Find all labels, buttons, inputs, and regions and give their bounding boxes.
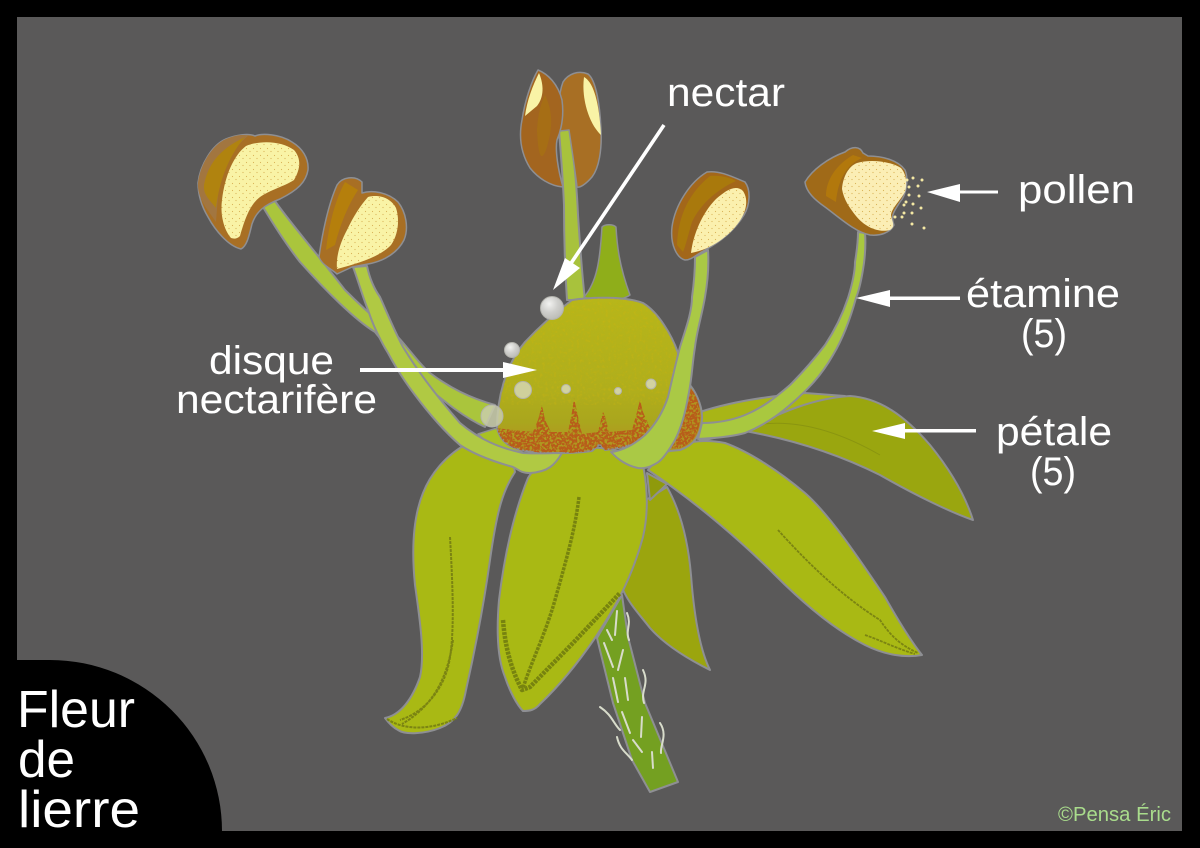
label: nectar: nectar	[667, 71, 785, 115]
petal: right	[648, 441, 922, 656]
label: étamine (5): étamine	[966, 272, 1120, 316]
label: disque nectarifère: nectarifère	[176, 378, 377, 422]
copyright: ©Pensa Éric	[1058, 803, 1171, 826]
label: disque nectarifère	[176, 339, 377, 422]
anther: top centre	[520, 70, 601, 187]
label: étamine (5)	[966, 272, 1120, 356]
flower stem	[597, 595, 678, 792]
stamen: outer right	[698, 232, 865, 439]
stamen: central back	[559, 127, 585, 300]
arrow: pollen	[927, 184, 998, 202]
title: Fleur	[17, 681, 135, 739]
right disc lobe	[660, 385, 702, 452]
stem hairs	[600, 611, 664, 768]
stamen: inner right	[611, 250, 708, 468]
stamen: lower left	[353, 266, 562, 473]
petal: centre	[498, 448, 647, 711]
title: de	[18, 731, 75, 789]
disc texture	[495, 295, 680, 460]
arrow: pétale	[872, 423, 976, 439]
label: étamine (5): (5)	[1021, 312, 1067, 356]
title: lierre	[18, 781, 140, 839]
anther: second left	[319, 178, 406, 274]
title	[17, 681, 140, 839]
label: disque nectarifère: disque	[209, 339, 334, 383]
arrow: nectar	[553, 124, 666, 290]
arrow: disque nectarifère	[360, 362, 537, 378]
pistil style	[584, 225, 630, 301]
title corner	[17, 660, 222, 839]
label: pétale (5)	[996, 410, 1112, 494]
nectar disc	[495, 295, 680, 460]
pollen grains	[894, 176, 926, 230]
petal: back right	[700, 393, 973, 520]
labels	[176, 71, 1135, 494]
title corner shape	[17, 660, 222, 831]
label: pétale (5): pétale	[996, 410, 1112, 454]
label: pollen: pollen	[1018, 168, 1135, 212]
label: pétale (5): (5)	[1030, 450, 1076, 494]
stamen: upper left	[263, 201, 495, 427]
petal: back centre	[623, 473, 710, 670]
sepal piece under disc	[478, 428, 525, 458]
petal: left	[385, 440, 515, 733]
anther: far right with pollen	[805, 148, 926, 235]
flower illustration	[198, 70, 973, 792]
anther: right	[672, 172, 749, 260]
nectar droplets	[481, 296, 656, 427]
arrow: étamine	[856, 290, 960, 307]
anther: far left	[198, 134, 308, 249]
